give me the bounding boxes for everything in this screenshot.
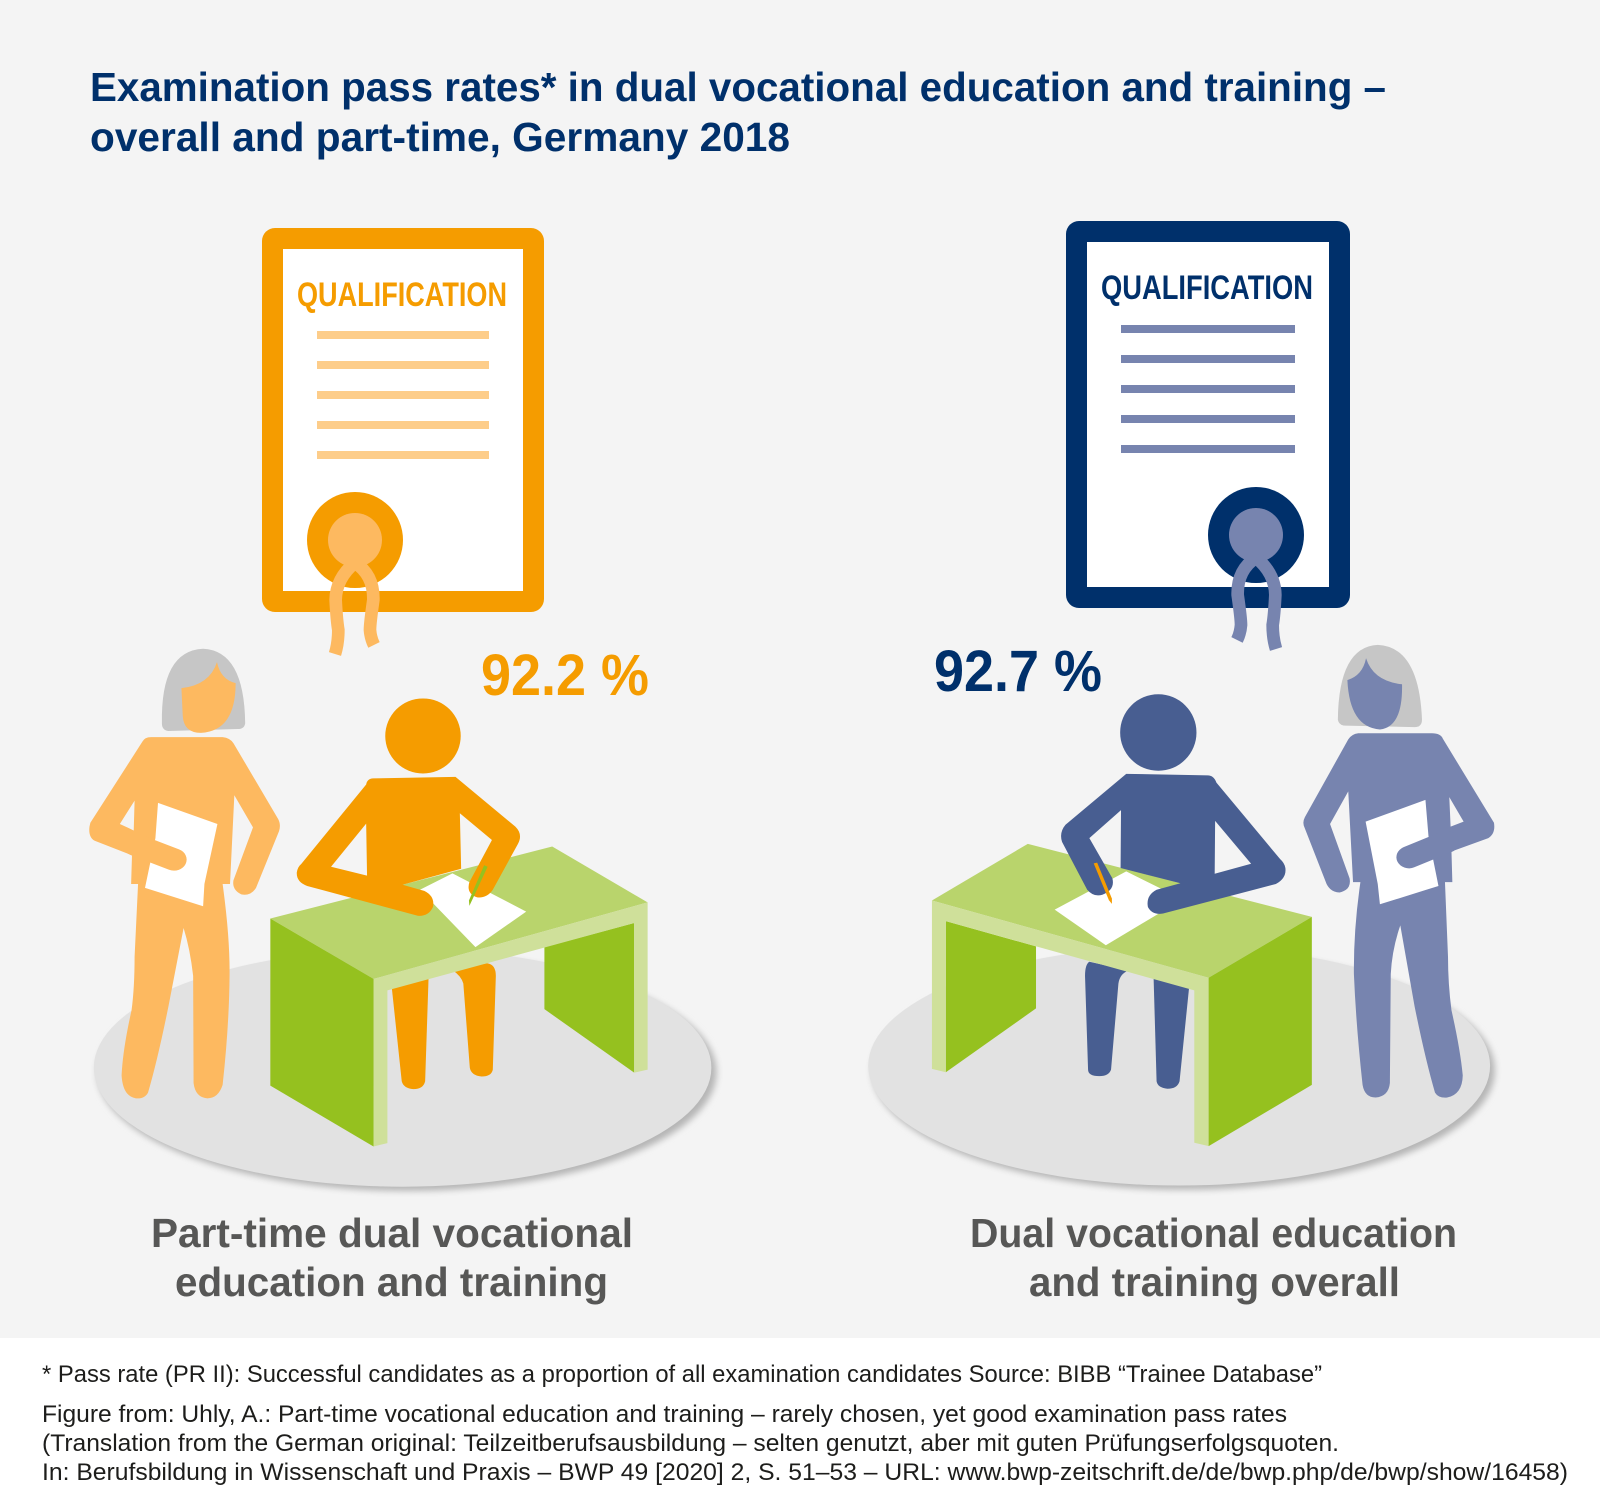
right woman's paper bbox=[1366, 800, 1438, 904]
left seated person bbox=[297, 698, 520, 916]
left desk bbox=[270, 847, 648, 1147]
footnote: * Pass rate (PR II): Successful candidates as a proportion of all examination candidates Source: BIBB “Trainee Database” bbox=[42, 1361, 1322, 1388]
title: overall and part-time, Germany 2018 bbox=[90, 114, 790, 160]
right desk paper bbox=[1055, 871, 1183, 945]
citation bbox=[42, 1401, 1568, 1486]
citation: In: Berufsbildung in Wissenschaft und Praxis – BWP 49 [2020] 2, S. 51–53 – URL: www.bwp-zeitschrift.de/de/bwp.php/de/bwp/show/16458) bbox=[42, 1459, 1568, 1486]
left scene bbox=[89, 649, 717, 1191]
left floor ellipse bbox=[94, 949, 717, 1191]
right woman's forearm bbox=[1409, 842, 1446, 857]
right caption bbox=[970, 1210, 1457, 1305]
left caption: education and training bbox=[175, 1259, 608, 1305]
right scene bbox=[868, 645, 1495, 1190]
left certificate text lines bbox=[317, 331, 489, 459]
title bbox=[90, 64, 1386, 160]
right caption: and training overall bbox=[1029, 1259, 1400, 1305]
left woman's paper bbox=[145, 803, 217, 906]
title: Examination pass rates* in dual vocational education and training – bbox=[90, 64, 1386, 110]
left seated person legs bbox=[392, 963, 496, 1089]
right certificate text lines bbox=[1121, 325, 1295, 453]
right certificate seal bbox=[1208, 487, 1304, 649]
left certificate heading: QUALIFICATION bbox=[297, 276, 507, 314]
citation: (Translation from the German original: Teilzeitberufsausbildung – selten genutzt, aber mit guten Prüfungserfolgsquoten. bbox=[42, 1430, 1339, 1457]
right desk bbox=[932, 844, 1312, 1146]
left standing woman bbox=[89, 649, 280, 1098]
left percentage: 92.2 % bbox=[481, 643, 649, 708]
right certificate bbox=[1066, 221, 1350, 649]
left desk back panel bbox=[544, 923, 634, 1073]
left woman's forearm bbox=[136, 845, 174, 860]
right pen bbox=[1094, 863, 1112, 904]
left certificate bbox=[262, 228, 544, 654]
left caption: Part-time dual vocational bbox=[151, 1210, 633, 1256]
right percentage: 92.7 % bbox=[934, 639, 1102, 704]
right seated person legs bbox=[1085, 962, 1189, 1089]
right seated person bbox=[1061, 694, 1286, 914]
right caption: Dual vocational education bbox=[970, 1210, 1457, 1256]
right standing woman bbox=[1303, 645, 1494, 1098]
left caption bbox=[151, 1210, 633, 1305]
right desk back panel bbox=[946, 921, 1036, 1072]
right floor ellipse bbox=[868, 946, 1495, 1190]
left desk paper bbox=[420, 873, 526, 947]
left pen bbox=[469, 865, 488, 906]
citation: Figure from: Uhly, A.: Part-time vocational education and training – rarely chosen, yet good examination pass rates bbox=[42, 1401, 1287, 1428]
right certificate heading: QUALIFICATION bbox=[1101, 269, 1313, 307]
left certificate seal bbox=[307, 492, 403, 654]
